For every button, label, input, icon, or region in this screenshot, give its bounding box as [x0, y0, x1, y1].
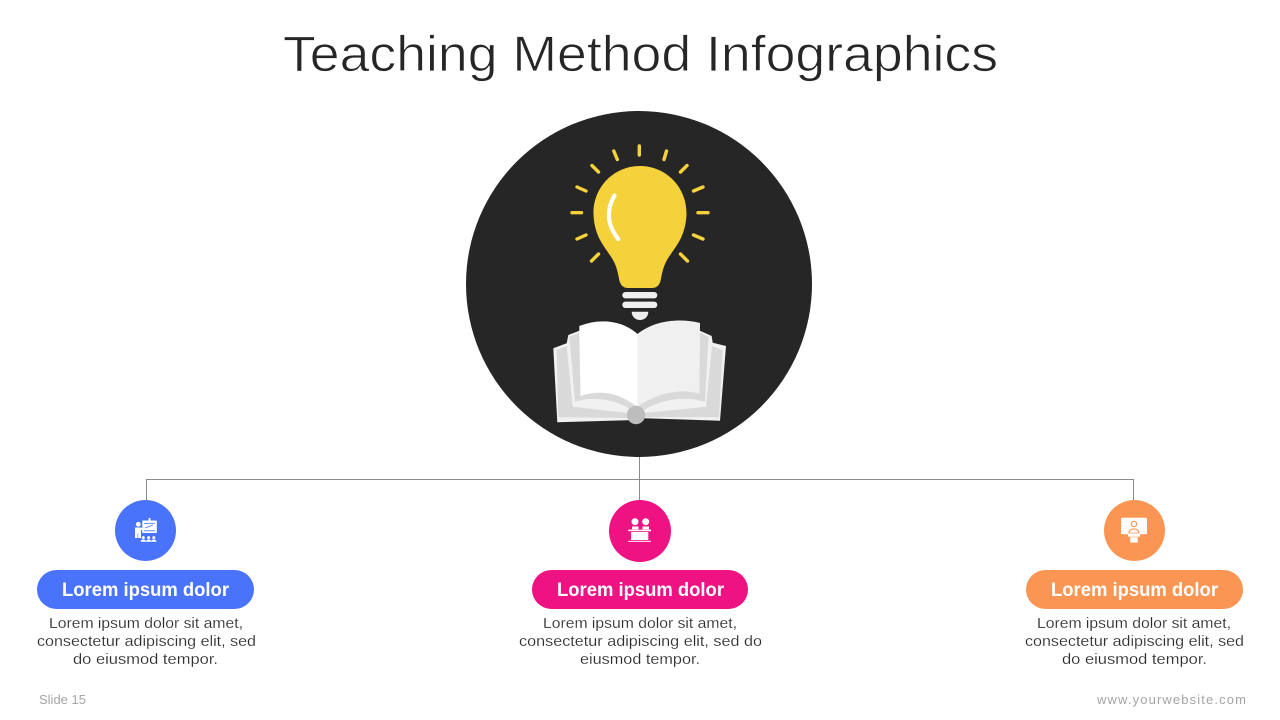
- pill label: Lorem ipsum dolor: [1051, 580, 1219, 601]
- description: Lorem ipsum dolor sit amet,: [49, 615, 243, 632]
- description: consectetur adipiscing elit, sed: [1025, 633, 1244, 650]
- icon: two speakers at desk: [609, 500, 671, 562]
- grey page stack left: [557, 346, 630, 418]
- pill label: Lorem ipsum dolor: [557, 580, 725, 601]
- footer website: www.yourwebsite.com: [1096, 692, 1246, 707]
- footer slide number: Slide 15: [39, 692, 86, 707]
- icon: open book: [553, 321, 726, 424]
- book spine dot: [627, 406, 645, 424]
- icon: light bulb: [572, 146, 708, 320]
- column 2: pink: [519, 500, 762, 668]
- bulb rays: [572, 146, 708, 261]
- column 1: blue: [37, 500, 256, 668]
- description: consectetur adipiscing elit, sed: [37, 633, 256, 650]
- pill label: Lorem ipsum dolor: [62, 580, 230, 601]
- description: Lorem ipsum dolor sit amet,: [1037, 615, 1231, 632]
- bulb base: [622, 292, 657, 320]
- outer cover: [553, 331, 726, 422]
- description: eiusmod tempor.: [580, 651, 700, 668]
- pill label: [1026, 570, 1243, 609]
- connector lines: [146, 456, 1134, 500]
- description: do eiusmod tempor.: [73, 651, 218, 668]
- bulb glass: [594, 166, 686, 288]
- description: consectetur adipiscing elit, sed do: [519, 633, 762, 650]
- icon: teacher at board: [115, 500, 176, 561]
- description: do eiusmod tempor.: [1062, 651, 1207, 668]
- grey page stack right: [642, 346, 723, 417]
- pill label: [37, 570, 254, 609]
- icon: presenter at screen: [1104, 500, 1165, 561]
- description: [37, 615, 256, 668]
- central dark circle: [466, 111, 812, 457]
- right page: [638, 321, 700, 407]
- description: Lorem ipsum dolor sit amet,: [543, 615, 737, 632]
- description: [519, 615, 762, 668]
- left page: [579, 321, 638, 407]
- bulb highlight: [609, 196, 618, 239]
- column 3: orange: [1025, 500, 1244, 668]
- description: [1025, 615, 1244, 668]
- title: Teaching Method Infographics: [283, 26, 998, 82]
- pill label: [532, 570, 748, 609]
